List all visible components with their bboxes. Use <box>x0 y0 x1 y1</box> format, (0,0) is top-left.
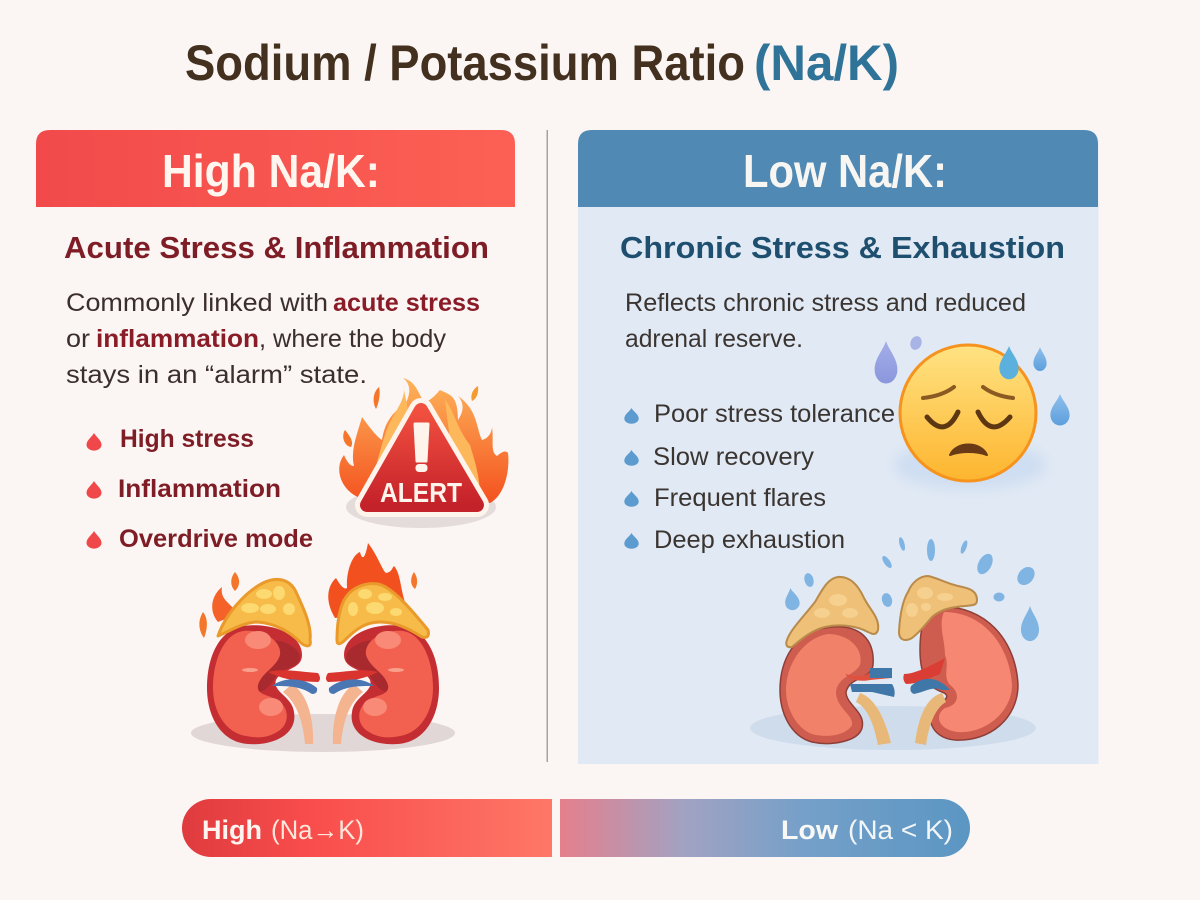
high panel description: acute stress <box>333 289 480 317</box>
high panel bullet list: Inflammation <box>118 475 281 503</box>
high panel description: or <box>66 325 90 353</box>
scale bar high segment: (Na→K) <box>271 815 364 845</box>
high panel header: High Na/K: <box>162 145 380 197</box>
high panel description: , where the body <box>259 325 447 353</box>
high panel description <box>66 289 480 389</box>
scale bar: high to low <box>182 799 970 857</box>
title: (Na/K) <box>754 35 899 91</box>
scale bar high segment: High <box>202 815 262 845</box>
title: Sodium / Potassium Ratio <box>185 35 745 91</box>
low panel header <box>578 130 1098 207</box>
panel: low Na/K <box>578 130 1098 764</box>
high panel header <box>36 130 515 207</box>
high panel description: Commonly linked with <box>66 289 328 317</box>
scale bar high segment <box>182 799 552 857</box>
panel: high Na/K <box>36 130 515 752</box>
icon: alert triangle with flames: ALERT <box>380 477 462 508</box>
low panel header: Low Na/K: <box>743 145 947 197</box>
icon: tired kidneys with water drops <box>750 537 1039 750</box>
scale bar low segment: (Na < K) <box>848 815 953 845</box>
scale bar low segment <box>560 799 970 857</box>
low panel bullet list: Poor stress tolerance <box>654 400 895 428</box>
low panel description <box>625 289 1026 353</box>
icon: alert triangle with flames <box>339 378 508 528</box>
icon: inflamed kidneys with flames <box>191 543 455 752</box>
low panel bullet list: Deep exhaustion <box>654 526 845 554</box>
high panel bullet list: Overdrive mode <box>119 525 313 553</box>
high panel subheading: Acute Stress & Inflammation <box>64 230 489 265</box>
icon: exhausted face with sweat drops <box>875 335 1070 489</box>
high panel description: stays in an “alarm” state. <box>66 361 367 389</box>
low panel subheading: Chronic Stress & Exhaustion <box>620 230 1065 265</box>
divider <box>546 130 548 762</box>
low panel bullet list: Slow recovery <box>653 443 815 471</box>
low panel bullet list: Frequent flares <box>654 484 826 512</box>
low panel bullet list <box>624 400 895 554</box>
low panel description: adrenal reserve. <box>625 325 803 353</box>
low panel description: Reflects chronic stress and reduced <box>625 289 1026 317</box>
high panel description: inflammation <box>96 325 259 353</box>
high panel bullet list: High stress <box>120 425 254 453</box>
high panel bullet list <box>86 425 313 553</box>
scale bar low segment: Low <box>781 815 839 845</box>
